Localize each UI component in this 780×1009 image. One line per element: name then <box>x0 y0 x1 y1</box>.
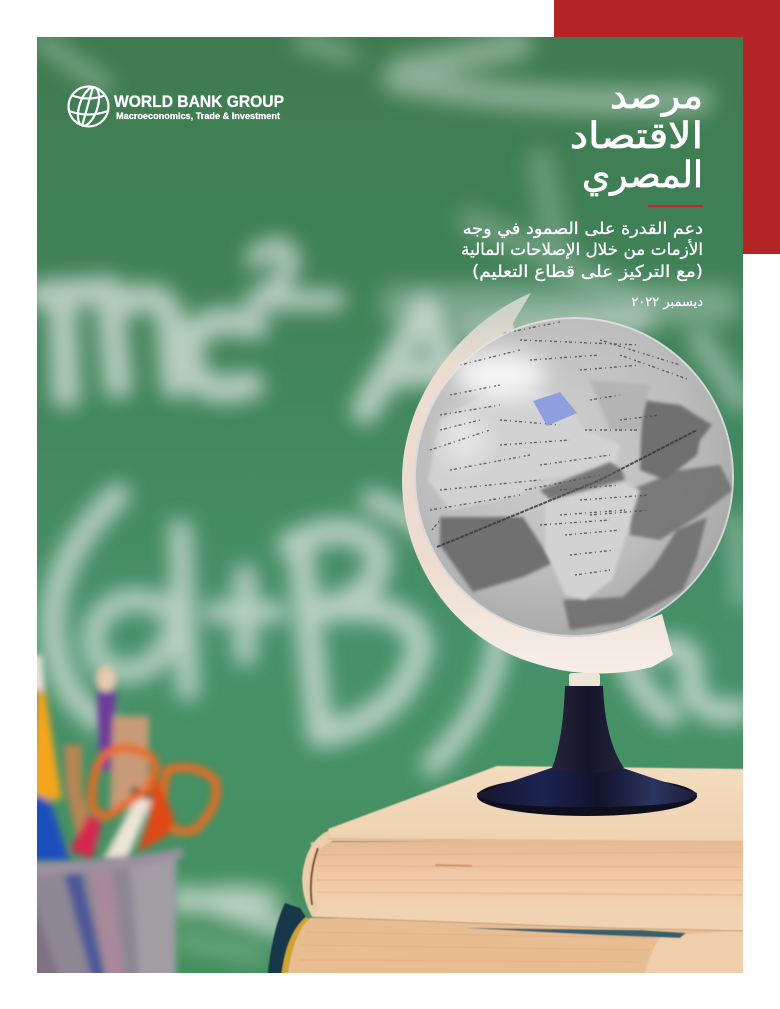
orange scissors <box>92 748 216 831</box>
purple pencil <box>97 690 116 770</box>
black globe base <box>477 686 697 816</box>
report subtitle: (مع التركيز على قطاع التعليم) <box>472 263 703 282</box>
base foot <box>477 766 697 807</box>
date: ديسمبر ٢٠٢٢ <box>631 295 703 310</box>
white marker <box>103 797 152 862</box>
report subtitle <box>461 220 703 282</box>
dark ocean patches <box>440 400 733 630</box>
yellow pencil <box>30 690 62 800</box>
bright highlight <box>454 351 546 399</box>
black marker band <box>131 787 152 800</box>
red rule <box>648 205 703 207</box>
globe <box>414 317 734 637</box>
report title: مرصد <box>610 75 703 117</box>
wire mesh cup <box>30 848 183 980</box>
upper book lower cover <box>312 907 743 932</box>
logo wordmark: WORLD BANK GROUP <box>114 93 284 111</box>
base neck <box>552 686 624 773</box>
upper book pages <box>311 840 750 908</box>
red corner block <box>554 0 780 254</box>
report subtitle: الأزمات من خلال الإصلاحات المالية <box>461 239 703 259</box>
lower book pages <box>287 917 727 973</box>
map label texture <box>430 322 690 575</box>
World Bank Group logo <box>68 85 284 128</box>
logo globe icon <box>68 85 108 128</box>
page lines <box>316 852 743 895</box>
pencil eraser tip <box>30 655 45 690</box>
wooden ruler <box>110 716 149 810</box>
globe sphere <box>414 317 734 637</box>
purple pencil cap <box>96 666 116 692</box>
lower page texture <box>298 932 655 962</box>
report title <box>570 75 703 196</box>
light land masses <box>428 380 650 600</box>
report subtitle: دعم القدرة على الصمود في وجه <box>463 220 703 239</box>
equator line <box>437 430 697 547</box>
dark red sea band <box>540 462 625 500</box>
upper book top cover <box>328 766 750 842</box>
lower book spine <box>267 903 306 980</box>
right lower pages <box>644 931 743 973</box>
blue bookmark strip <box>465 928 686 938</box>
globe stand arc <box>402 293 673 674</box>
globe stand connector <box>569 673 600 687</box>
base rim <box>477 781 697 816</box>
pencil cup contents <box>30 655 216 862</box>
upper book spine edge <box>302 830 335 917</box>
small pencil <box>64 745 98 850</box>
report title: المصري <box>582 155 703 196</box>
report title: الاقتصاد <box>570 115 703 157</box>
sphere edge shading <box>415 318 733 636</box>
scissor blades <box>138 775 175 852</box>
red marker <box>70 815 102 860</box>
Egypt highlighted in blue <box>533 392 577 426</box>
logo subtitle: Macroeconomics, Trade & Investment <box>116 111 280 121</box>
stack of books <box>267 766 750 980</box>
lower book binding <box>281 917 310 980</box>
blue marker <box>30 795 70 862</box>
